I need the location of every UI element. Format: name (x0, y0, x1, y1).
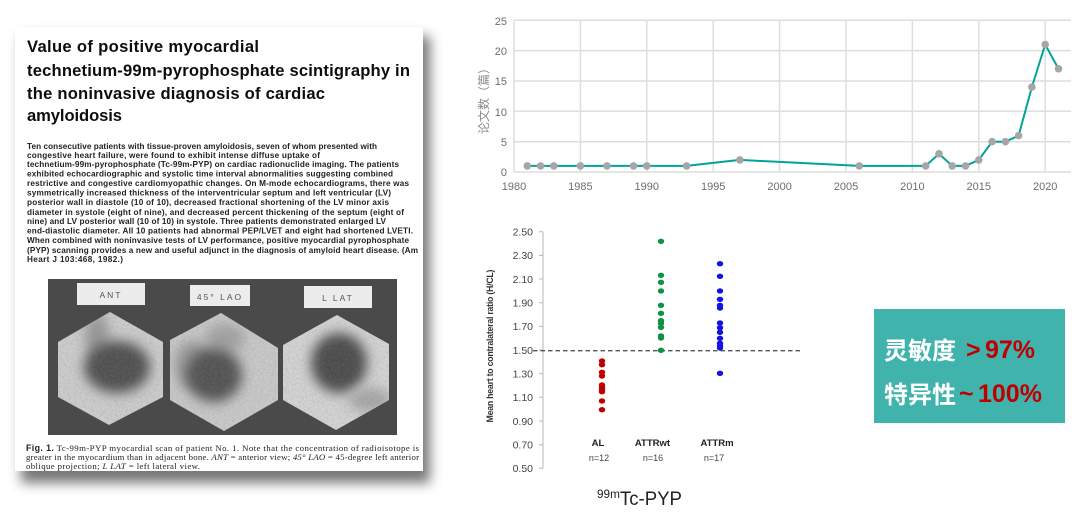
panel sheet (15, 27, 423, 471)
sensitivity value: 97% (985, 336, 1035, 364)
x axis labels: 2010 (900, 181, 925, 193)
group labels: n=17 (704, 453, 724, 463)
article title: the noninvasive diagnosis of cardiac (27, 84, 325, 103)
gridlines (514, 20, 1071, 172)
specificity value: ~ (959, 380, 974, 408)
article abstract: congestive heart failure, were found to exhibit intense diffuse uptake of (27, 151, 320, 160)
tracer label: 99m (597, 487, 620, 501)
sensitivity value (884, 336, 1035, 365)
y axis labels: 10 (495, 107, 507, 119)
y axis labels: 0 (501, 167, 507, 179)
data markers (524, 41, 1062, 170)
article abstract (27, 142, 418, 264)
specificity value: 100% (978, 380, 1042, 408)
panel shadow (21, 36, 430, 483)
data line (527, 44, 1058, 166)
group labels: n=16 (643, 453, 663, 463)
view label: 45 LAO (190, 285, 250, 306)
y axis labels: 0.50 (513, 463, 533, 475)
specificity value (884, 380, 1042, 409)
y axis title: 论文数（篇） (476, 62, 491, 134)
article abstract: Ten consecutive patients with tissue-proven amyloidosis, seven of whom presented with (27, 142, 377, 151)
callout background (874, 309, 1065, 423)
callout: sensitivity and specificity (874, 309, 1065, 423)
view label: ANT: ANT (100, 290, 122, 300)
group labels: ATTRwt (635, 438, 671, 449)
y axis labels: 1.70 (513, 321, 533, 333)
y axis labels: 1.10 (513, 392, 533, 404)
x axis labels (502, 181, 1057, 193)
article abstract: When combined with noninvasive tests of LV performance, positive myocardial pyrophosphate (27, 236, 409, 245)
ATTRwt dots (658, 239, 664, 353)
y axis labels: 15 (495, 76, 507, 88)
article abstract: restrictive and congestive cardiomyopathic changes. On M-mode echocardiograms, there was (27, 179, 409, 188)
scatter chart: H/CL ratio (485, 226, 800, 510)
figure caption: greater in the myocardium than in adjacent bone. ANT = anterior view; 45° LAO = 45-degree left anterior (26, 452, 419, 462)
x axis labels: 2020 (1033, 181, 1057, 193)
y axis labels: 0.90 (513, 416, 533, 428)
x axis labels: 1985 (568, 181, 593, 193)
y axis labels (495, 16, 507, 179)
y axis title: Mean heart to contralateral ratio (H/CL) (485, 269, 495, 422)
line chart: papers per year (476, 16, 1071, 193)
tracer label: Tc-PYP (620, 489, 682, 510)
article title: amyloidosis (27, 106, 122, 125)
x axis labels: 1990 (635, 181, 659, 193)
x axis labels: 2000 (767, 181, 792, 193)
view label: L LAT: L LAT (322, 293, 354, 303)
AL dots (599, 358, 605, 412)
ATTRm dots (717, 261, 723, 376)
y axis labels: 2.30 (513, 250, 533, 262)
article abstract: Heart J 103:468, 1982.) (27, 255, 123, 264)
x axis labels: 2015 (967, 181, 991, 193)
article abstract: nine) and LV posterior wall (10 of 10) in systole. Three patients demonstrated enlarged LV (27, 217, 387, 226)
y axis labels: 1.30 (513, 368, 533, 380)
article title: Value of positive myocardial (27, 37, 259, 56)
y axis and ticks (539, 232, 543, 468)
article title: technetium-99m-pyrophosphate scintigraphy in (27, 61, 410, 80)
group labels: ATTRm (700, 438, 734, 449)
sensitivity value: 灵敏度 (884, 338, 956, 365)
scintigraphy figure (48, 279, 397, 435)
figure caption (26, 443, 420, 471)
sensitivity value: > (966, 336, 981, 364)
x axis labels: 1980 (502, 181, 526, 193)
y axis labels: 20 (495, 46, 507, 58)
specificity value: 特异性 (884, 382, 956, 409)
article abstract: exhibited echocardiographic and systolic time interval abnormalities suggesting combined (27, 170, 393, 178)
article abstract: technetium-99m-pyrophosphate (Tc-99m-PYP) on cardiac radionuclide imaging. The patients (27, 160, 399, 169)
y axis labels: 5 (501, 137, 507, 149)
view label: L LAT (304, 286, 372, 308)
y axis labels: 1.50 (513, 345, 533, 357)
threshold dashed line (533, 350, 800, 352)
y axis labels: 2.50 (513, 226, 533, 238)
y axis labels: 0.70 (513, 440, 533, 452)
scan: anterior view (58, 312, 163, 425)
x axis labels: 2005 (834, 181, 858, 193)
scan: left lateral view (283, 315, 389, 430)
y axis labels (513, 226, 533, 475)
y axis labels: 2.10 (513, 274, 533, 286)
article abstract: posterior wall in diastole (10 of 10), decreased fractional shortening of the LV minor axis (27, 198, 389, 207)
article abstract: (PYP) scanning provides a new and useful adjunct in the diagnosis of amyloid heart disease. (Am (27, 246, 418, 255)
group labels (589, 438, 734, 463)
view label: 45 LAO: 45° LAO (197, 292, 243, 302)
article abstract: diameter in systole (eight of nine), and decreased percent thickening of the septum (eight of (27, 208, 404, 217)
y axis labels: 1.90 (513, 298, 533, 310)
group labels: AL (592, 438, 605, 449)
article abstract: end-diastolic diameter. All 10 patients had abnormal PEP/LVET and eight had shortened LVETI. (27, 226, 413, 236)
figure caption: Fig. 1. Tc-99m-PYP myocardial scan of patient No. 1. Note that the concentration of radioisotope is (26, 443, 420, 453)
y axis labels: 25 (495, 16, 507, 28)
group labels: n=12 (589, 453, 609, 463)
x axis labels: 1995 (701, 181, 725, 193)
article title (27, 37, 410, 125)
view label: ANT (77, 283, 145, 305)
figure background (48, 279, 397, 435)
article abstract: symmetrically increased thickness of the interventricular septum and left ventricular (LV) (27, 188, 391, 198)
scan: 45 degree LAO view (170, 313, 278, 431)
panel: journal article (15, 27, 430, 483)
figure caption: oblique projection; L LAT = left lateral view. (26, 461, 200, 471)
